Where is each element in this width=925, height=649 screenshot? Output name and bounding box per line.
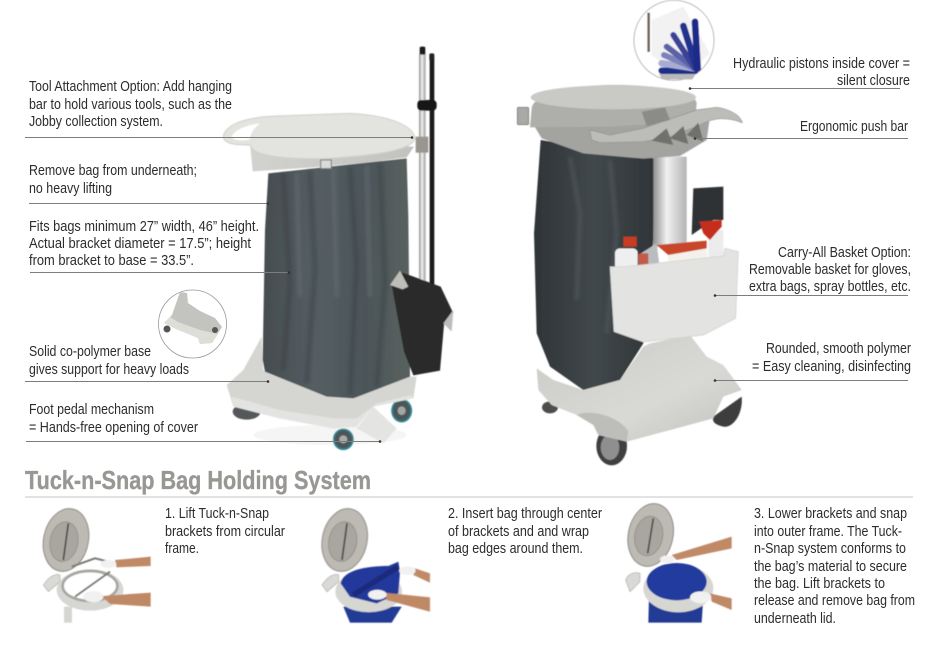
step 3 text: [754, 506, 915, 627]
callout: foot pedal: = Hands-free opening of cover: [29, 420, 198, 436]
step 1 photo: [38, 504, 151, 623]
callout: foot pedal: [26, 402, 381, 443]
step 2 text: bag edges around them.: [448, 541, 583, 557]
dark bag: [534, 140, 654, 390]
step 2 text: [448, 506, 602, 557]
step 3 text: the bag. Lift brackets to: [754, 576, 885, 592]
illustration: cart with carry-all basket: [517, 0, 742, 465]
callout: rounded polymer: [714, 341, 911, 382]
step 2 text: 2. Insert bag through center: [448, 506, 602, 522]
callout: remove bag: no heavy lifting: [29, 181, 112, 197]
black roll of bags: [692, 187, 723, 235]
lid and push bar: [530, 85, 742, 159]
polymer base: [537, 335, 742, 442]
callout: tool attachment: bar to hold various tools, such as the: [29, 97, 232, 113]
carry-all basket: [610, 248, 738, 342]
callout: bag size: Fits bags minimum 27” width, 46” height.: [29, 219, 259, 235]
callout: solid base: Solid co-polymer base: [29, 344, 151, 360]
callout: tool attachment: [25, 79, 413, 139]
callout: solid base: gives support for heavy loads: [29, 362, 189, 378]
callout: tool attachment: Tool Attachment Option: Add hanging: [29, 79, 232, 95]
inset: base detail: [158, 290, 226, 358]
basket contents: [615, 220, 723, 275]
step 2 photo: [316, 504, 430, 623]
lid with hanging bar: [223, 113, 415, 171]
step 3 text: underneath lid.: [754, 611, 836, 627]
callout: solid base: [25, 344, 269, 383]
callout: hydraulic pistons: silent closure: [837, 73, 910, 89]
callout: hydraulic pistons: [689, 56, 910, 90]
step 1 text: frame.: [165, 541, 199, 557]
callout: bag size: from bracket to base = 33.5”.: [29, 253, 194, 269]
callout: foot pedal: Foot pedal mechanism: [29, 402, 154, 418]
callout: remove bag: [29, 163, 269, 205]
callout: basket option: [714, 245, 911, 297]
wheeled base: [227, 337, 417, 449]
callout: remove bag: Remove bag from underneath;: [29, 163, 197, 179]
dustpan: [390, 271, 453, 375]
callout: bag size: [29, 219, 290, 274]
step 1 text: 1. Lift Tuck-n-Snap: [165, 506, 269, 522]
inset: hydraulic piston and cover motion: [634, 0, 714, 80]
telescopic tool poles: [416, 47, 437, 292]
step 3 photo: [622, 499, 732, 623]
rear and front wheels: [542, 397, 742, 465]
cover bracket at back: [517, 107, 529, 125]
grey bag: [263, 158, 410, 398]
step 3 text: into outer frame. The Tuck-: [754, 524, 902, 540]
step 1 text: [165, 506, 285, 557]
illustration: cart with dustpan and tools: [223, 47, 453, 449]
step 2 text: of brackets and and wrap: [448, 524, 589, 540]
callout: bag size: Actual bracket diameter = 17.5”; height: [29, 236, 251, 252]
silver column: [653, 157, 687, 247]
cart shadow: [253, 425, 407, 445]
step 1 text: brackets from circular: [165, 524, 285, 540]
callout: tool attachment: Jobby collection system.: [29, 114, 163, 130]
section heading: Tuck-n-Snap Bag Holding System: [25, 465, 371, 495]
